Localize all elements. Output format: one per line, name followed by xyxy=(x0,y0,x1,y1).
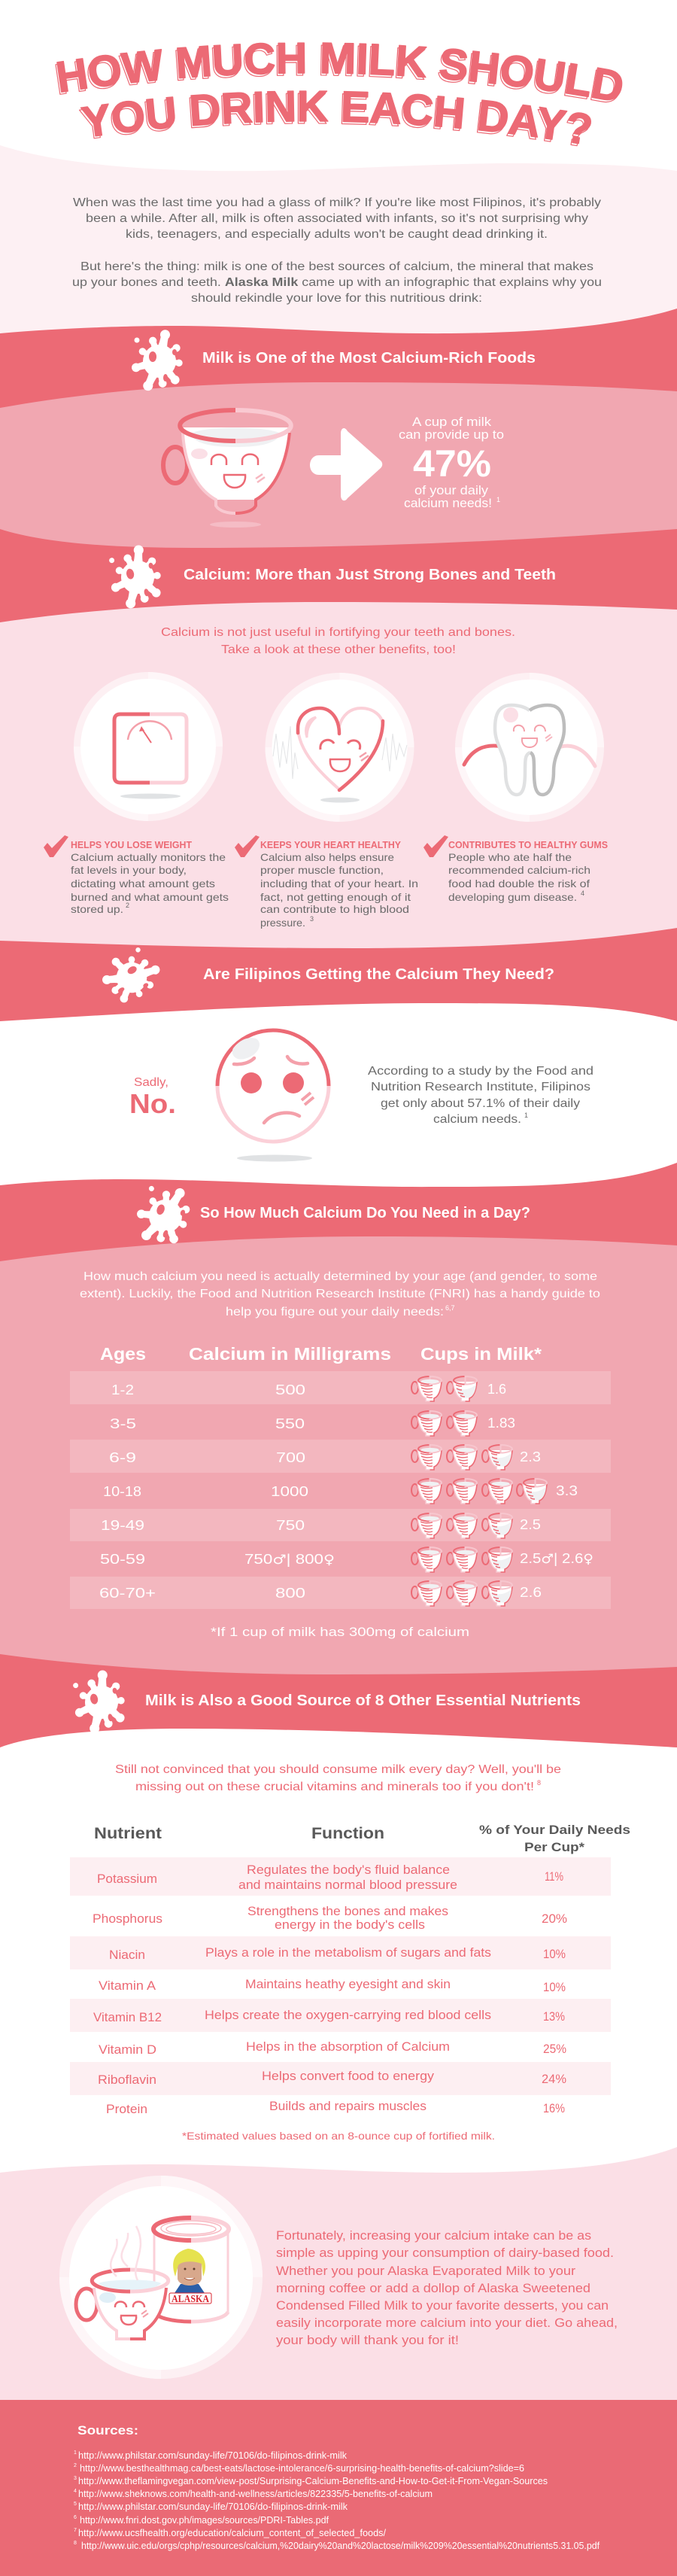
row 1-2 xyxy=(70,1371,611,1404)
row protein xyxy=(106,2100,565,2116)
sources heading: Sources: xyxy=(77,2423,138,2438)
row 60-70+: 60-70+ xyxy=(99,1585,156,1601)
row potassium xyxy=(70,1857,611,1896)
table header: Function xyxy=(311,1825,384,1842)
sources list: 4 xyxy=(74,2489,77,2494)
icon: weighing scale xyxy=(74,672,223,821)
sources list: 5 xyxy=(74,2501,77,2507)
icon: milk splat xyxy=(102,540,170,616)
row potassium: and maintains normal blood pressure xyxy=(238,1878,457,1892)
section heading: more than bones: Calcium: More than Just Strong Bones and Teeth xyxy=(184,567,556,583)
row 1-2: 1.6 xyxy=(487,1381,506,1397)
row vitamin d xyxy=(99,2040,566,2057)
sources list: http://www.philstar.com/sunday-life/70106/do-filipinos-drink-milk xyxy=(78,2450,348,2461)
benefits intro: Take a look at these other benefits, too! xyxy=(221,643,456,656)
study text: According to a study by the Food and xyxy=(368,1065,594,1078)
benefit: healthy gums: food had double the risk of xyxy=(448,877,590,890)
row 3-5: 1.83 xyxy=(487,1415,515,1431)
table header: Nutrient xyxy=(94,1825,162,1842)
table header: Calcium in Milligrams xyxy=(189,1344,391,1364)
benefit: heart healthy: fact, not getting enough of it xyxy=(260,891,411,903)
row 19-49 xyxy=(70,1509,611,1541)
row vitamin a: 10% xyxy=(543,1981,566,1994)
answer: sadly no: Sadly, xyxy=(134,1076,168,1089)
icon: alaska milk can and cup xyxy=(59,2176,263,2379)
closing text: your body will thank you for it! xyxy=(276,2334,459,2347)
benefit: heart healthy: 3 xyxy=(310,915,314,923)
benefit: heart healthy: Calcium also helps ensure xyxy=(260,851,394,863)
study text: 1 xyxy=(524,1112,528,1119)
closing text: morning coffee or add a dollop of Alaska Sweetened xyxy=(276,2282,590,2295)
benefit: lose weight: dictating what amount gets xyxy=(71,877,215,890)
intro text xyxy=(72,196,602,305)
benefit: heart healthy: proper muscle function, xyxy=(260,864,384,876)
row 6-9 xyxy=(70,1440,611,1473)
sources list: http://www.fnri.dost.gov.ph/images/sources/PDRI-Tables.pdf xyxy=(80,2515,329,2526)
benefit: healthy gums xyxy=(424,835,608,903)
row vitamin a: Maintains heathy eyesight and skin xyxy=(245,1978,451,1991)
intro text: up your bones and teeth. Alaska Milk came up with an infographic that explains why you xyxy=(72,276,602,289)
benefit: healthy gums: 4 xyxy=(581,890,584,897)
nutrients footnote: *Estimated values based on an 8-ounce cup of fortified milk. xyxy=(182,2130,495,2142)
row 19-49: 19-49 xyxy=(101,1517,144,1533)
row vitamin a: Vitamin A xyxy=(99,1979,156,1993)
study text: Nutrition Research Institute, Filipinos xyxy=(371,1081,590,1093)
icon: milk splat xyxy=(65,1665,134,1741)
sources list: 8 xyxy=(74,2541,77,2546)
benefit: lose weight: stored up. xyxy=(71,903,123,915)
study text xyxy=(368,1065,594,1126)
callout: 47 percent: of your daily xyxy=(414,484,489,497)
row phosphorus: energy in the body's cells xyxy=(275,1918,425,1932)
intro text: should rekindle your love for this nutritious drink: xyxy=(191,292,482,305)
callout: 47 percent: can provide up to xyxy=(399,428,504,442)
nutrients intro: Still not convinced that you should consume milk every day? Well, you'll be xyxy=(115,1763,561,1776)
row vitamin a xyxy=(99,1978,566,1994)
row 60-70+: 800 xyxy=(275,1585,305,1601)
title: YOU DRINK EACH DAY? xyxy=(78,93,589,146)
sources list: http://www.theflamingvegan.com/view-post/Surprising-Calcium-Benefits-and-How-to-Get-it-From-Vegan-Sources xyxy=(78,2476,548,2486)
section heading: how much calcium: So How Much Calcium Do You Need in a Day? xyxy=(200,1205,530,1221)
answer: sadly no xyxy=(129,1076,176,1119)
section heading: other nutrients xyxy=(65,1665,581,1741)
closing text: Condensed Filled Milk to your favorite desserts, you can xyxy=(276,2299,609,2313)
row 3-5: 550 xyxy=(275,1416,305,1431)
icon: milk splat xyxy=(125,1174,202,1258)
row protein: Protein xyxy=(106,2103,147,2116)
row niacin: Plays a role in the metabolism of sugars and fats xyxy=(205,1946,491,1960)
sources list: http://www.sheknows.com/health-and-wellness/articles/822335/5-benefits-of-calcium xyxy=(78,2489,433,2499)
benefit: lose weight: 2 xyxy=(126,902,129,909)
callout: 47 percent: A cup of milk xyxy=(412,415,492,429)
benefit: healthy gums: CONTRIBUTES TO HEALTHY GUMS xyxy=(448,839,608,850)
row 50-59: 750 ♂| 800 ♀ xyxy=(244,1551,335,1568)
table: calcium needs by age xyxy=(70,1344,611,1609)
title: HOW MUCH MILK SHOULD xyxy=(55,45,618,102)
icon: sad face xyxy=(217,1030,329,1162)
benefits intro xyxy=(161,626,515,656)
row vitamin b12 xyxy=(70,1999,611,2032)
closing text xyxy=(276,2229,618,2347)
sources list: http://www.besthealthmag.ca/best-eats/lactose-intolerance/6-surprising-health-benefits-of-calcium?slide=6 xyxy=(80,2463,524,2474)
row phosphorus: Phosphorus xyxy=(93,1912,162,1926)
section heading: more than bones xyxy=(102,540,556,616)
callout: 47 percent: 47% xyxy=(413,443,491,485)
section heading: other nutrients: Milk is Also a Good Source of 8 Other Essential Nutrients xyxy=(145,1692,581,1709)
alaska label: ALASKA xyxy=(172,2294,210,2305)
table: nutrients xyxy=(70,1823,630,2116)
row 3-5 xyxy=(110,1411,515,1436)
row niacin: 10% xyxy=(543,1948,566,1961)
row niacin: Niacin xyxy=(109,1948,145,1962)
closing text: easily incorporate more calcium into your diet. Go ahead, xyxy=(276,2316,618,2330)
table header: Per Cup* xyxy=(524,1840,584,1854)
sources list: http://www.philstar.com/sunday-life/70106/do-filipinos-drink-milk xyxy=(78,2501,348,2512)
icon: milk splat xyxy=(129,327,186,395)
row niacin xyxy=(70,1936,611,1969)
row riboflavin: 24% xyxy=(542,2073,566,2086)
benefit: lose weight: Calcium actually monitors the xyxy=(71,851,226,863)
benefit: lose weight xyxy=(44,835,229,915)
icon: smiling milk cup xyxy=(163,410,291,528)
row vitamin b12: 13% xyxy=(543,2010,565,2024)
study text: calcium needs. xyxy=(433,1113,521,1126)
closing text: Whether you pour Alaska Evaporated Milk to your xyxy=(276,2264,576,2278)
calcium intro text: 6,7 xyxy=(445,1304,455,1312)
steaming cup xyxy=(76,2226,168,2339)
row vitamin d: Helps in the absorption of Calcium xyxy=(246,2040,450,2054)
row 60-70+ xyxy=(70,1577,611,1609)
benefit: healthy gums: recommended calcium-rich xyxy=(448,864,590,876)
benefits intro: Calcium is not just useful in fortifying your teeth and bones. xyxy=(161,626,515,639)
callout: 47 percent: calcium needs! xyxy=(404,497,492,510)
row 50-59 xyxy=(100,1547,594,1572)
icon: check mark xyxy=(424,835,448,857)
row 50-59: 2.5♂| 2.6♀ xyxy=(520,1550,594,1567)
section heading: calcium-rich foods: Milk is One of the Most Calcium-Rich Foods xyxy=(202,350,536,366)
row 19-49: 750 xyxy=(276,1517,305,1533)
nutrients intro: missing out on these crucial vitamins and minerals too if you don't! xyxy=(135,1781,534,1793)
benefit: lose weight: HELPS YOU LOSE WEIGHT xyxy=(71,839,192,850)
row 60-70+: 2.6 xyxy=(520,1584,542,1600)
row vitamin b12: Helps create the oxygen-carrying red blood cells xyxy=(205,2009,491,2022)
sources list xyxy=(74,2450,600,2551)
nutrients intro xyxy=(115,1763,561,1793)
row riboflavin: Helps convert food to energy xyxy=(262,2070,435,2083)
icon: milk splat xyxy=(90,938,171,1014)
table header: % of Your Daily Needs xyxy=(479,1823,630,1837)
row 6-9: 6-9 xyxy=(109,1449,136,1465)
milk can xyxy=(153,2218,229,2322)
callout: 47 percent xyxy=(399,415,504,510)
sources list: http://www.ucsfhealth.org/education/calcium_content_of_selected_foods/ xyxy=(78,2528,387,2538)
study text: get only about 57.1% of their daily xyxy=(381,1097,580,1110)
benefit: lose weight: burned and what amount gets xyxy=(71,891,229,903)
sources list: 6 xyxy=(74,2515,77,2520)
calcium intro text xyxy=(80,1270,600,1318)
row phosphorus xyxy=(93,1905,567,1932)
intro text: been a while. After all, milk is often associated with infants, so it's not surprising why xyxy=(86,212,588,225)
title: YOU DRINK EACH DAY? xyxy=(80,90,591,144)
intro text: But here's the thing: milk is one of the best sources of calcium, the mineral that makes xyxy=(80,260,594,273)
intro text: When was the last time you had a glass of milk? If you're like most Filipinos, it's probably xyxy=(73,196,601,209)
row 10-18 xyxy=(103,1479,578,1504)
table footnote: *If 1 cup of milk has 300mg of calcium xyxy=(211,1625,469,1639)
row potassium: Regulates the body's fluid balance xyxy=(247,1863,450,1877)
row 6-9: 2.3 xyxy=(520,1449,541,1464)
intro text: kids, teenagers, and especially adults won't be caught dead drinking it. xyxy=(126,228,548,241)
benefit: healthy gums: developing gum disease. xyxy=(448,891,577,903)
answer: sadly no: No. xyxy=(129,1088,176,1119)
section heading: calcium-rich foods xyxy=(129,327,536,395)
title xyxy=(55,42,623,146)
row vitamin b12: Vitamin B12 xyxy=(93,2011,162,2024)
benefit: healthy gums: People who ate half the xyxy=(448,851,572,863)
row vitamin d: Vitamin D xyxy=(99,2043,156,2057)
calcium intro text: extent). Luckily, the Food and Nutrition Research Institute (FNRI) has a handy guide to xyxy=(80,1288,600,1300)
row vitamin d: 25% xyxy=(543,2042,566,2056)
alaska boy xyxy=(173,2249,205,2293)
row phosphorus: Strengthens the bones and makes xyxy=(247,1905,448,1918)
arrow xyxy=(310,428,382,500)
row protein: 16% xyxy=(543,2102,565,2115)
icon: check mark xyxy=(235,835,260,857)
section heading: how much calcium xyxy=(125,1174,530,1258)
row 10-18: 1000 xyxy=(271,1483,308,1499)
benefit: heart healthy xyxy=(235,835,418,929)
benefit: heart healthy: KEEPS YOUR HEART HEALTHY xyxy=(260,839,401,850)
row phosphorus: 20% xyxy=(542,1912,567,1926)
benefit: heart healthy: can contribute to high blood xyxy=(260,903,409,915)
section heading: are filipinos getting calcium xyxy=(90,938,554,1014)
row protein: Builds and repairs muscles xyxy=(269,2100,427,2113)
row 6-9: 700 xyxy=(276,1449,305,1465)
sources list: 2 xyxy=(74,2463,77,2468)
callout: 47 percent: 1 xyxy=(496,496,500,503)
closing text: simple as upping your consumption of dairy-based food. xyxy=(276,2246,614,2260)
row riboflavin: Riboflavin xyxy=(98,2073,156,2087)
row potassium: Potassium xyxy=(97,1872,157,1886)
closing text: Fortunately, increasing your calcium intake can be as xyxy=(276,2229,591,2243)
row 1-2: 500 xyxy=(275,1382,305,1397)
benefit: lose weight: fat levels in your body, xyxy=(71,864,187,876)
sources list: http://www.uic.edu/orgs/cphp/resources/calcium,%20dairy%20and%20lactose/milk%209%20essential%20nutrients5.31.05.pdf xyxy=(81,2541,600,2551)
row potassium: 11% xyxy=(545,1870,563,1884)
row 19-49: 2.5 xyxy=(520,1516,541,1532)
table header: Cups in Milk* xyxy=(420,1344,542,1364)
icon: check mark xyxy=(44,835,68,857)
row 1-2: 1-2 xyxy=(111,1382,134,1397)
nutrients intro: 8 xyxy=(537,1779,541,1787)
sources list: 3 xyxy=(74,2476,77,2481)
table header xyxy=(94,1823,630,1854)
row 10-18: 3.3 xyxy=(556,1483,578,1498)
section heading: are filipinos getting calcium: Are Filipinos Getting the Calcium They Need? xyxy=(203,966,554,983)
title: HOW MUCH MILK SHOULD xyxy=(56,42,623,101)
benefit: heart healthy: including that of your heart. In xyxy=(260,877,418,890)
row 50-59: 50-59 xyxy=(100,1551,145,1567)
sources list: 7 xyxy=(74,2528,77,2533)
icon: tooth xyxy=(455,673,604,822)
sources list: 1 xyxy=(74,2450,77,2456)
table header xyxy=(100,1344,542,1364)
icon: heart xyxy=(265,673,414,822)
row 10-18: 10-18 xyxy=(103,1483,141,1499)
row 3-5: 3-5 xyxy=(110,1416,136,1431)
benefit: heart healthy: pressure. xyxy=(260,917,305,929)
calcium intro text: How much calcium you need is actually determined by your age (and gender, to some xyxy=(83,1270,597,1283)
row riboflavin xyxy=(70,2062,611,2095)
table header: Ages xyxy=(100,1344,146,1364)
calcium intro text: help you figure out your daily needs: xyxy=(226,1306,444,1318)
